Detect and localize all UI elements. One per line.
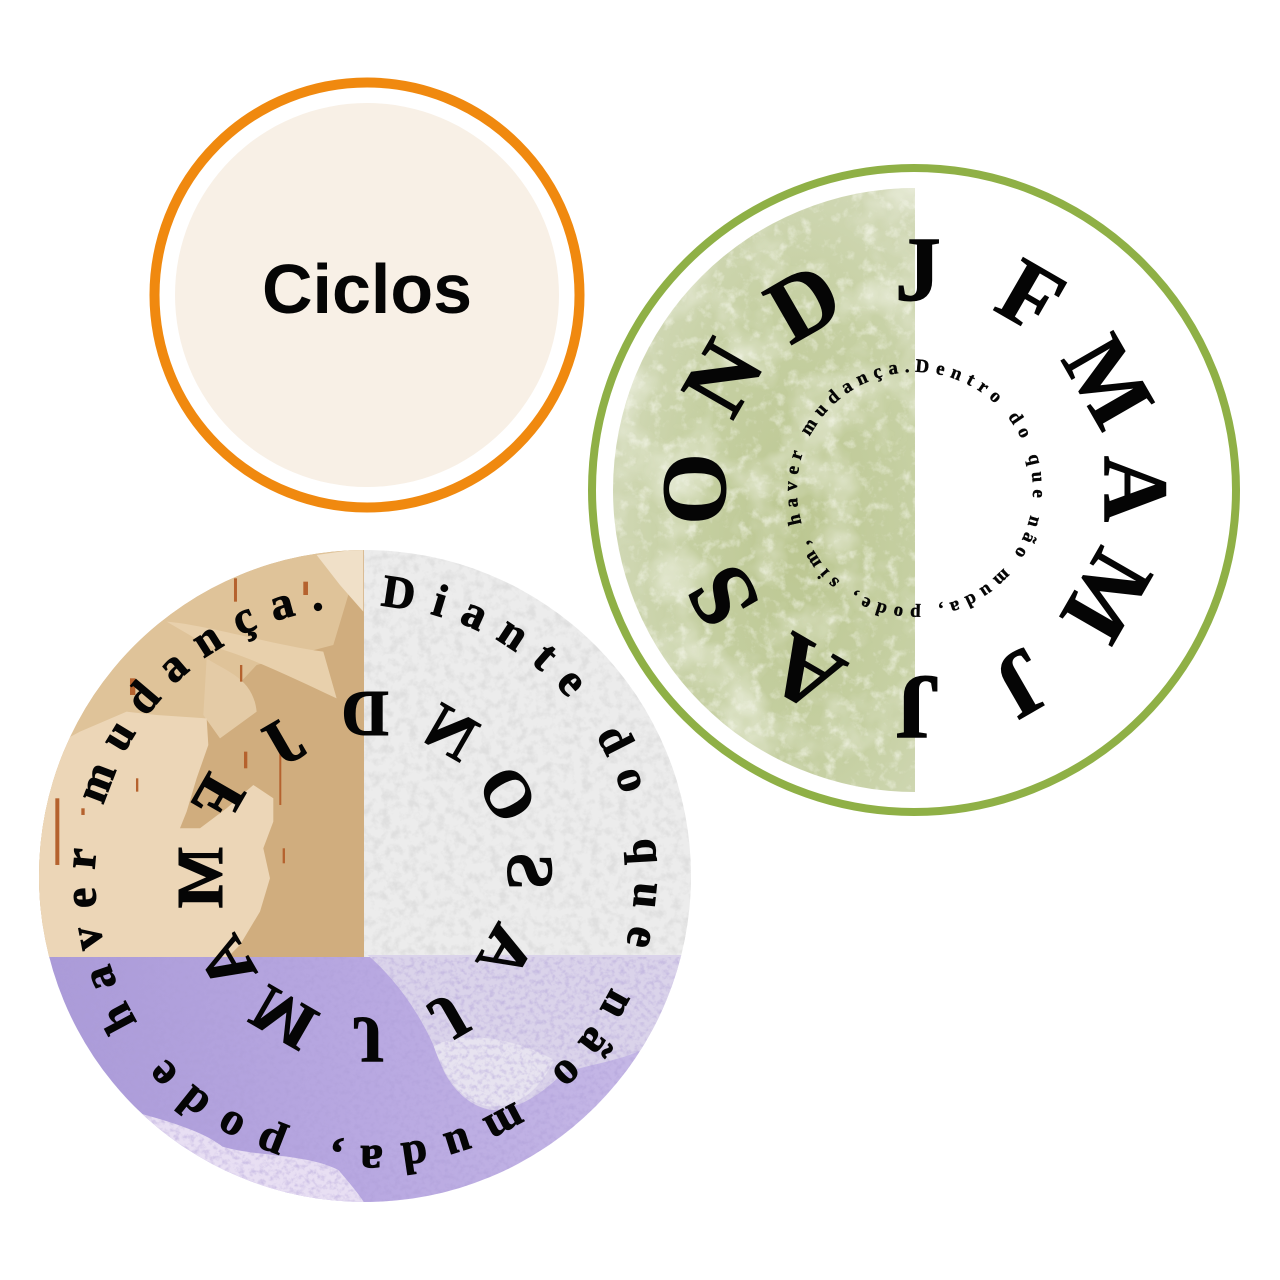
panel: tri-colour circle cycle bbox=[39, 550, 691, 1202]
brown quadrant bbox=[30, 540, 364, 958]
textured quadrants bbox=[30, 540, 703, 1213]
purple half bbox=[49, 955, 682, 1202]
month initials ring: A bbox=[751, 613, 860, 735]
month initials ring: S bbox=[665, 549, 779, 644]
month initials ring, mirrored: D bbox=[341, 677, 389, 750]
panel: Ciclos title circle bbox=[154, 82, 580, 508]
grey quadrant bbox=[364, 540, 700, 957]
month initials ring: F bbox=[982, 238, 1081, 354]
month initials ring bbox=[643, 218, 1187, 759]
cream disc bbox=[175, 103, 559, 487]
green textured half disc bbox=[610, 186, 916, 794]
month initials ring: M bbox=[1043, 318, 1175, 445]
month initials ring, mirrored: J bbox=[352, 1003, 384, 1076]
inner circular sentence: Dentro do que não muda, pode, sim, haver mudança. bbox=[788, 359, 1042, 618]
outer circular sentence: Diante do que não muda, pode haver mudança. bbox=[73, 575, 658, 1176]
month initials ring: A bbox=[1085, 456, 1187, 522]
month initials ring, mirrored: J bbox=[252, 702, 317, 781]
month initials ring, mirrored: A bbox=[462, 913, 549, 991]
month initials ring: O bbox=[643, 453, 745, 525]
month initials ring, mirrored: O bbox=[463, 754, 552, 835]
month initials ring: M bbox=[1041, 533, 1173, 660]
panel: green circle cycle bbox=[588, 164, 1240, 816]
month initials ring: N bbox=[661, 323, 783, 432]
green ring bbox=[592, 168, 1236, 812]
month initials ring, mirrored: N bbox=[412, 689, 490, 776]
month initials ring, mirrored bbox=[164, 677, 566, 1076]
title: Ciclos bbox=[262, 250, 472, 328]
orange ring bbox=[154, 82, 580, 508]
month initials ring: J bbox=[895, 218, 941, 320]
month initials ring, mirrored: M bbox=[239, 970, 329, 1065]
month initials ring: D bbox=[749, 241, 858, 363]
month initials ring, mirrored: M bbox=[164, 847, 237, 909]
month initials ring, mirrored: A bbox=[184, 924, 271, 1002]
month initials ring, mirrored: J bbox=[416, 978, 481, 1057]
month initials ring, mirrored: F bbox=[177, 763, 260, 834]
month initials ring, mirrored: S bbox=[493, 853, 566, 889]
month initials ring: J bbox=[977, 628, 1068, 740]
month initials ring: J bbox=[895, 657, 941, 759]
